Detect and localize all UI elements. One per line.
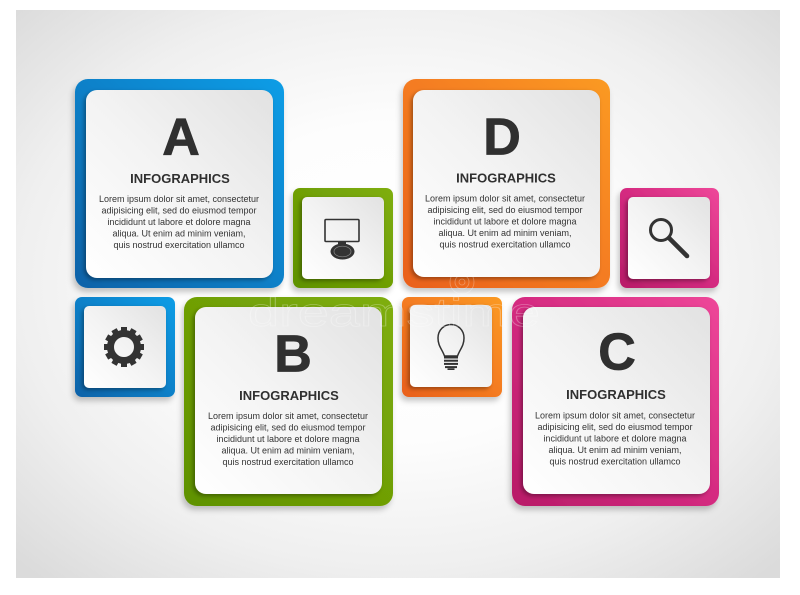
panel: card A: aliqua. Ut enim ad minim veniam, (112, 228, 246, 238)
panel: card B: Lorem ipsum dolor sit amet, consectetur (208, 411, 368, 421)
panel: card A: Lorem ipsum dolor sit amet, consectetur (99, 194, 259, 204)
icon: monitor (325, 220, 359, 260)
panel: card D: aliqua. Ut enim ad minim veniam, (438, 228, 572, 238)
panel: bulb tile (402, 297, 502, 397)
panel: card C: C (598, 324, 636, 382)
panel: card A: incididunt ut labore et dolore magna (107, 217, 251, 227)
panel: card A: A (162, 108, 200, 166)
panel: card A: adipisicing elit, sed do eiusmod tempor (101, 206, 257, 216)
panel: card D: INFOGRAPHICS (456, 170, 556, 186)
panel: card B: B (274, 326, 312, 384)
panel: card B: aliqua. Ut enim ad minim veniam, (221, 446, 355, 456)
panel: card A: INFOGRAPHICS (130, 171, 230, 186)
watermark: dreamstime (248, 291, 540, 335)
icon: light bulb (438, 324, 464, 370)
panel: card C: INFOGRAPHICS (566, 387, 666, 402)
panel: card A (75, 79, 284, 288)
panel: card D: adipisicing elit, sed do eiusmod tempor (427, 205, 583, 215)
panel: card C: aliqua. Ut enim ad minim veniam, (548, 445, 682, 455)
panel: card D: D (483, 108, 521, 166)
panel: card D: Lorem ipsum dolor sit amet, consectetur (425, 194, 585, 204)
panel: card C: quis nostrud exercitation ullamco (549, 456, 681, 466)
panel: card D (403, 79, 610, 288)
panel: card C: Lorem ipsum dolor sit amet, consectetur (535, 410, 695, 420)
panel: card B: incididunt ut labore et dolore magna (216, 434, 360, 444)
panel: card C: adipisicing elit, sed do eiusmod tempor (537, 422, 693, 432)
panel: gear tile (75, 297, 175, 397)
panel: card B: quis nostrud exercitation ullamco (222, 457, 354, 467)
panel: card D: quis nostrud exercitation ullamco (439, 240, 571, 250)
panel: card C: incididunt ut labore et dolore magna (543, 434, 687, 444)
panel: monitor tile (293, 188, 393, 288)
panel: card B (184, 297, 393, 506)
panel: card A: quis nostrud exercitation ullamco (113, 240, 245, 250)
panel: card B: adipisicing elit, sed do eiusmod tempor (210, 422, 366, 432)
panel: card C (512, 297, 719, 506)
watermark (248, 270, 540, 335)
panel: card B: INFOGRAPHICS (239, 388, 339, 403)
panel: card D: incididunt ut labore et dolore magna (433, 216, 577, 226)
panel: search tile (620, 188, 719, 288)
icon: magnifier (650, 220, 687, 256)
icon: gear (104, 327, 144, 367)
